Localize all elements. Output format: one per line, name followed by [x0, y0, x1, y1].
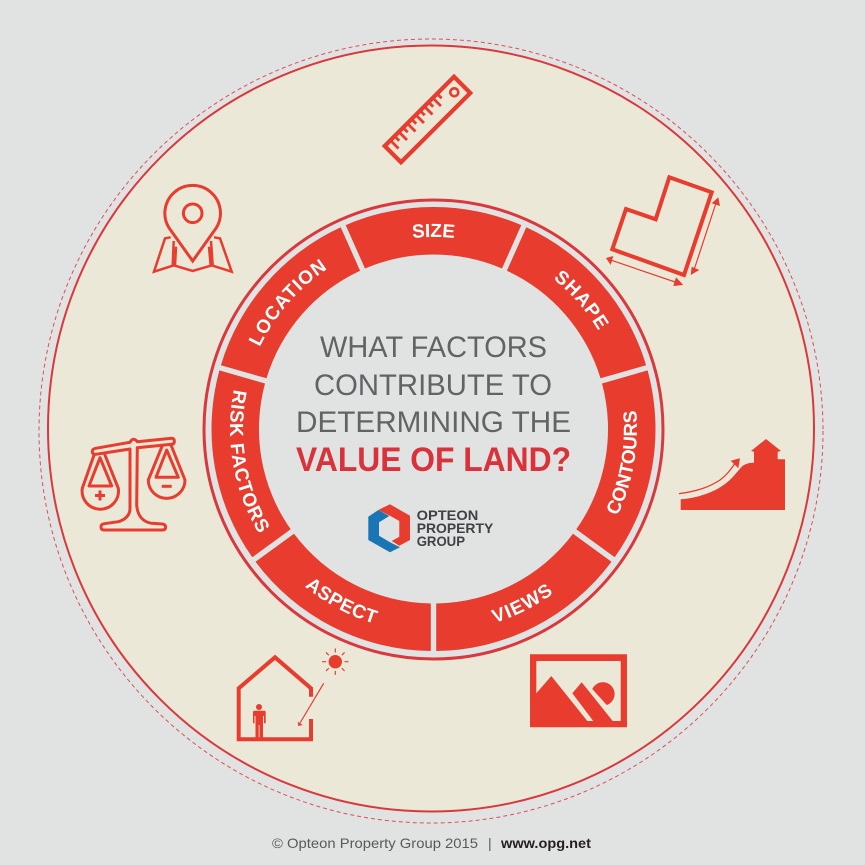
segment: location — [220, 227, 360, 378]
title: DETERMINING THE — [296, 406, 571, 439]
segment: contours — [576, 370, 656, 558]
icon: land shape with dimension arrows — [606, 177, 720, 286]
icon: location pin on map — [154, 185, 232, 272]
icon: ruler (size) — [385, 77, 470, 162]
segment: contours: CONTOURS — [607, 411, 637, 514]
opteon logo — [368, 504, 494, 552]
title — [296, 331, 571, 479]
icon: contours hill and house — [679, 439, 785, 510]
icon: views picture frame — [530, 654, 627, 727]
segment: shape — [506, 227, 646, 378]
icon: aspect house with sun — [239, 648, 348, 739]
segment: views: VIEWS — [490, 584, 552, 622]
icon: person — [253, 704, 266, 738]
title: CONTRIBUTE TO — [314, 369, 552, 402]
footer credit: © Opteon Property Group 2015 — [272, 835, 478, 851]
icon: sun — [322, 648, 348, 675]
segment: risk factors: RISK FACTORS — [230, 390, 269, 532]
outer cream disc — [48, 46, 814, 812]
logo wordmark — [417, 507, 494, 549]
logo mark — [368, 504, 410, 552]
title: VALUE OF LAND? — [296, 441, 571, 479]
segment: shape: SHAPE — [555, 270, 609, 330]
logo wordmark: OPTEON — [417, 507, 478, 523]
footer credit: www.opg.net — [500, 835, 591, 851]
footer credit: | — [488, 835, 492, 851]
segment: size: SIZE — [412, 224, 454, 238]
logo wordmark: GROUP — [417, 533, 465, 549]
segment: risk factors — [212, 370, 291, 558]
segment: aspect — [256, 534, 431, 651]
segment: size — [346, 207, 522, 268]
central wheel background — [204, 200, 663, 659]
logo wordmark: PROPERTY — [417, 520, 494, 536]
segment: views — [436, 534, 612, 651]
segment: aspect: ASPECT — [305, 579, 378, 622]
title: WHAT FACTORS — [320, 331, 547, 364]
segment: location: LOCATION — [248, 258, 326, 346]
factor wheel — [174, 184, 696, 685]
footer credit — [272, 835, 591, 851]
icon: risk scales — [82, 438, 185, 530]
